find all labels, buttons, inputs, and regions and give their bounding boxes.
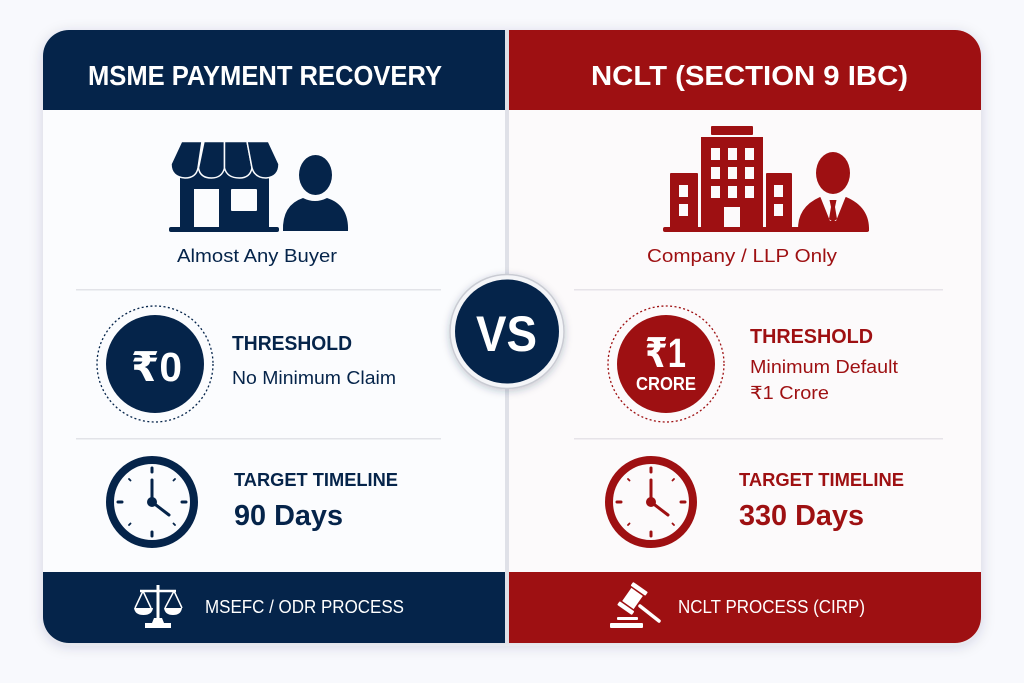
- footer band: NCLT: [509, 572, 981, 643]
- icon: one crore badge: [608, 306, 724, 422]
- icon: zero rupee badge: ₹0: [131, 344, 182, 390]
- timeline value left: 90 Days: [234, 500, 343, 532]
- header band: MSME: [43, 30, 505, 110]
- icon: one crore badge: CRORE: [636, 373, 696, 394]
- threshold text right: Minimum Default: [750, 357, 898, 377]
- icon: clock right: [609, 460, 693, 544]
- heading: NCLT: NCLT (SECTION 9 IBC): [591, 60, 908, 91]
- footer band: MSME: [43, 572, 505, 643]
- footer label right: NCLT PROCESS (CIRP): [678, 597, 865, 617]
- footer label left: MSEFC / ODR PROCESS: [205, 597, 404, 617]
- label: company / LLP only: Company / LLP Only: [647, 246, 837, 266]
- icon: buyer person: [283, 155, 348, 231]
- icon: gavel: [610, 582, 659, 628]
- header band: NCLT: [509, 30, 981, 110]
- icon: scales: [134, 585, 182, 628]
- threshold heading right: THRESHOLD: [750, 326, 873, 348]
- threshold amount right: ₹1 Crore: [750, 383, 829, 403]
- icon: shop: [169, 142, 279, 232]
- VS badge: VS: [476, 306, 537, 362]
- timeline value right: 330 Days: [739, 500, 864, 532]
- panel: NCLT section 9: [507, 30, 981, 643]
- heading: MSME: MSME PAYMENT RECOVERY: [88, 60, 442, 91]
- icon: one crore badge: ₹1: [645, 330, 686, 376]
- icon: clock left: [110, 460, 194, 544]
- threshold text left: No Minimum Claim: [232, 368, 396, 388]
- timeline heading right: TARGET TIMELINE: [739, 469, 904, 490]
- icon: zero rupee badge: [97, 306, 213, 422]
- icon: suited person: [798, 152, 869, 231]
- icon: office building: [663, 126, 869, 232]
- threshold heading left: THRESHOLD: [232, 333, 352, 355]
- panel: MSME payment recovery: [43, 30, 506, 643]
- VS badge: [450, 274, 564, 388]
- timeline heading left: TARGET TIMELINE: [234, 469, 398, 490]
- label: almost any buyer: Almost Any Buyer: [177, 246, 337, 266]
